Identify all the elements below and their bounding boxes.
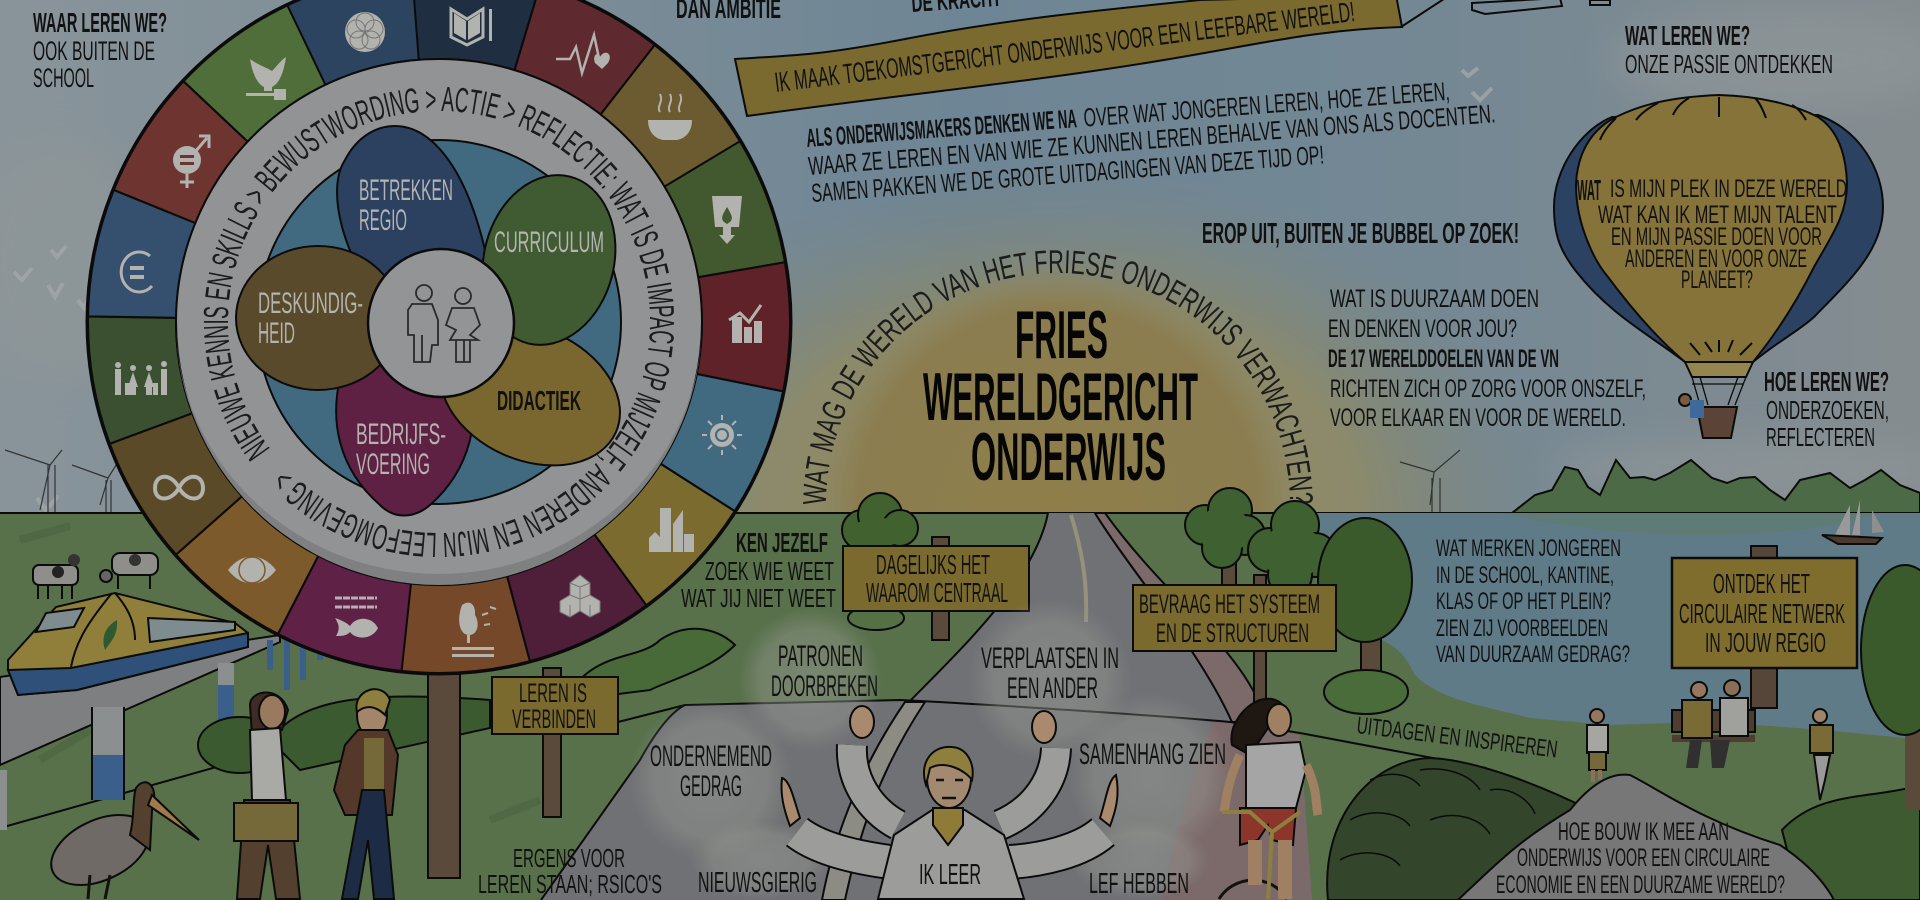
woman walking (234, 692, 300, 899)
hoe leren we (1764, 366, 1889, 452)
icon: bowl (648, 94, 692, 140)
ergens caption: ERGENS VOOR (513, 843, 625, 873)
segment: poverty (82, 302, 195, 445)
segment: land (395, 575, 530, 677)
circulair sign (1672, 546, 1857, 708)
skill labels: DOORBREKEN (771, 670, 878, 703)
wheel post (428, 670, 460, 878)
cyclist arms (1224, 755, 1318, 815)
infographic canvas: WERELDGERICHT (923, 359, 1198, 435)
blue inner disc (257, 140, 621, 504)
top left heading (33, 7, 167, 93)
clouds (0, 10, 1920, 500)
cyclist head (1267, 704, 1291, 736)
road centre stripe (1071, 515, 1086, 622)
petal: betrekken regio: REGIO (359, 204, 407, 237)
ergens caption: LEREN STAAN; RSICO'S (478, 869, 662, 899)
petal: curriculum: CURRICULUM (494, 226, 604, 259)
balloon text: WAT (1577, 175, 1601, 207)
balloon blue envelope (1554, 115, 1883, 362)
balloon passenger (1679, 394, 1704, 418)
balloon seams (1600, 97, 1806, 355)
skill labels: EEN ANDER (1007, 672, 1098, 705)
rock text (1496, 818, 1785, 899)
petal: deskundigheid: HEID (258, 317, 295, 350)
icon: family (115, 361, 167, 395)
jongeren text: IN DE SCHOOL, KANTINE, (1436, 562, 1614, 589)
horizon line (0, 512, 1920, 514)
cyclist hair (1231, 699, 1286, 755)
sailing boat (1822, 500, 1884, 544)
skill labels: PATRONEN (778, 640, 863, 673)
hanging blue drips (270, 640, 320, 690)
segment: quality education (402, 0, 540, 72)
distant treeline (1512, 460, 1920, 513)
icon: energy (702, 415, 742, 455)
sky background (0, 0, 1920, 515)
leren is verbinden sign (492, 668, 618, 817)
ken jezelf: WAT JIJ NIET WEET (681, 583, 836, 613)
sun glow (558, 163, 1558, 863)
segment: inequality (82, 189, 199, 334)
bench with youths (1672, 680, 1755, 768)
learner upper left arm (852, 745, 898, 825)
icon: growth chart (729, 305, 762, 343)
rock text: HOE BOUW IK MEE AAN (1558, 818, 1729, 846)
intro paragraph: ALS ONDERWIJSMAKERS DENKEN WE NA (805, 103, 1078, 153)
duurzaam text block: RICHTEN ZICH OP ZORG VOOR ONSZELF, (1330, 375, 1646, 403)
bushes around daily sign (842, 493, 918, 630)
top left heading: SCHOOL (33, 63, 94, 93)
cyclist shorts (1240, 808, 1296, 845)
rock with question (1458, 775, 1834, 900)
learner shirt label: IK LEER (919, 859, 981, 891)
circulair sign: IN JOUW REGIO (1705, 627, 1826, 658)
bike path upper (1095, 513, 1258, 722)
segment: cities (583, 452, 739, 609)
trees along road (1185, 488, 1412, 714)
wind turbines (5, 450, 1460, 513)
ken jezelf: KEN JEZELF (736, 527, 828, 558)
crossing path (822, 702, 925, 900)
dagelijks sign: DAGELIJKS HET (876, 549, 990, 580)
learner head (927, 748, 971, 808)
intro paragraph: WAAR ZE LEREN EN VAN WIE ZE KUNNEN LEREN BEHALVE VAN ONS ALS DOCENTEN. (807, 98, 1496, 181)
birds as check marks (14, 68, 1492, 543)
petal: betrekken regio (337, 126, 485, 300)
road edge lines (541, 513, 1232, 900)
learner lower right arm (1010, 832, 1103, 862)
sun half disc (813, 263, 1303, 763)
learner upper right arm (1000, 748, 1056, 825)
lake (1300, 513, 1920, 740)
uitdagen caption: UITDAGEN EN INSPIREREN (1355, 712, 1559, 764)
bevraag sign: EN DE STRUCTUREN (1156, 618, 1309, 648)
segment: hunger (590, 41, 745, 199)
icon: health pulse (556, 35, 610, 73)
monorail bridge (0, 635, 320, 830)
skill labels: GEDRAG (680, 770, 742, 803)
wat leren we (1625, 20, 1833, 79)
grass strokes (20, 526, 540, 880)
meadow ground (0, 513, 1920, 900)
balloon text (1577, 175, 1847, 294)
intro paragraph (805, 76, 1496, 208)
segment: gender (109, 78, 256, 237)
skill labels: SAMENHANG ZIEN (1079, 738, 1226, 771)
cows (33, 553, 158, 599)
ken jezelf: ZOEK WIE WEET (705, 556, 834, 586)
icon: flower (345, 12, 385, 52)
wheel outer circle (87, 0, 791, 674)
duurzaam text block: VOOR ELKAAR EN VOOR DE WERELD. (1330, 404, 1626, 432)
erop uit heading: EROP UIT, BUITEN JE BUBBEL OP ZOEK! (1202, 218, 1519, 250)
large front bush (1327, 758, 1590, 900)
right tree (1861, 565, 1920, 810)
skill labels: NIEUWSGIERIG (698, 867, 817, 899)
curved sun text: WAT MAG DE WERELD VAN HET FRIESE ONDERWIJS VERWACHTEN? (803, 250, 1313, 504)
petal: bedrijfsvoering: VOERING (356, 448, 430, 481)
segment: consumption (105, 399, 250, 558)
jongeren text (1436, 535, 1630, 668)
title: FRIES (1015, 297, 1108, 373)
icon: gender (173, 136, 209, 188)
petal: didactiek: DIDACTIEK (497, 385, 581, 416)
ring curved text: NIEUWE KENNIS EN SKILLS > BEWUSTWORDING > ACTIE > REFLECTIE: WAT IS DE IMPACT OP MIJZELF, ANDEREN EN MIJN LEEFOMGEVING > (204, 87, 674, 557)
icon: infinity (155, 477, 203, 498)
jongeren text: VAN DUURZAAM GEDRAG? (1436, 641, 1630, 668)
segment: health (500, 0, 657, 122)
girl with phone (1810, 709, 1833, 800)
icon: eye with globe (228, 556, 276, 584)
circulair sign: ONTDEK HET (1713, 568, 1810, 599)
cyclist (1219, 699, 1318, 899)
icon: tree (452, 603, 496, 657)
learner lower right arm fill (1010, 832, 1103, 862)
tow plane (1472, 0, 1610, 14)
icon: fish (335, 598, 378, 638)
jongeren text: WAT MERKEN JONGEREN (1436, 535, 1621, 562)
learner upper right arm fill (1000, 748, 1056, 825)
segment: sea (276, 551, 426, 677)
bike wheel (1219, 880, 1287, 899)
intro paragraph: SAMEN PAKKEN WE DE GROTE UITDAGINGEN VAN DEZE TIJD OP! (810, 140, 1325, 208)
icon: cubes (560, 575, 600, 617)
bush leaf lines (1340, 769, 1535, 866)
tow line (1401, 0, 1450, 27)
balloon text: PLANEET? (1681, 266, 1753, 294)
inner gray ring (176, 59, 702, 585)
icon: book (451, 9, 492, 45)
segment: energy (655, 359, 789, 513)
skill labels: ONDERNEMEND (650, 740, 772, 773)
learner hair (924, 747, 973, 785)
learner face (936, 780, 963, 798)
petal: deskundigheid: DESKUNDIG- (258, 287, 363, 320)
jongeren text: ZIEN ZIJ VOORBEELDEN (1436, 615, 1608, 642)
walking boy (1587, 709, 1608, 782)
skill bubbles glow (629, 598, 1232, 899)
petal: bedrijfsvoering: BEDRIJFS- (356, 418, 446, 451)
bevraag sign (1133, 575, 1336, 705)
segment: growth (697, 261, 791, 391)
ken jezelf (681, 527, 836, 613)
learner hands (781, 706, 1118, 826)
man walking (334, 689, 398, 899)
ergens caption (478, 843, 662, 899)
duurzaam text block (1328, 285, 1646, 432)
bridge pillars (0, 663, 234, 830)
centre circle with students (368, 249, 514, 397)
balloon basket (1697, 407, 1737, 438)
skill labels (650, 640, 1226, 900)
petal: curriculum (465, 161, 633, 359)
icon: water (712, 196, 742, 244)
segment: water (659, 139, 790, 292)
jongeren text: KLAS OF OP HET PLEIN? (1436, 588, 1611, 615)
duurzaam text block: WAT IS DUURZAAM DOEN (1330, 285, 1539, 313)
banner (735, 0, 1402, 116)
leren is verbinden sign: LEREN IS (519, 678, 587, 708)
hedges left (198, 629, 735, 773)
duurzaam text block: DE 17 WERELDDOELEN VAN DE VN (1328, 345, 1559, 373)
title: ONDERWIJS (971, 419, 1166, 495)
leren is verbinden sign: VERBINDEN (512, 704, 596, 734)
segment: climate (173, 486, 331, 639)
learner torso (878, 810, 1024, 899)
dagelijks sign: WAAROM CENTRAAL (866, 577, 1008, 608)
balloon yellow envelope (1576, 95, 1847, 362)
bicycle frame (1222, 812, 1300, 899)
balloon neck (1685, 362, 1753, 377)
learner figure (781, 706, 1118, 899)
godwit bird (40, 782, 199, 899)
top left heading: WAAR LEREN WE? (33, 7, 167, 38)
learner lower left arm (797, 832, 890, 862)
petal: betrekken regio: BETREKKEN (359, 174, 453, 207)
petal: didactiek (417, 295, 643, 493)
hot air balloon (1554, 95, 1883, 438)
dagelijks sign (843, 537, 1029, 640)
bevraag sign: BEVRAAG HET SYSTEEM (1139, 589, 1320, 619)
petal: deskundigheid (236, 246, 400, 390)
bike path lower (1162, 722, 1312, 900)
segment: partnership (286, 0, 434, 89)
cyclist shirt (1246, 742, 1306, 808)
learner lower left arm fill (797, 832, 890, 862)
learner upper left arm fill (852, 745, 898, 825)
ring inner shade (176, 322, 702, 585)
balloon ropes (1692, 377, 1746, 405)
icon: two students (408, 285, 480, 362)
cyclist leg (1255, 840, 1285, 899)
SDG wheel (86, 0, 792, 676)
title (923, 297, 1198, 495)
top left heading: OOK BUITEN DE (33, 36, 155, 66)
petal: bedrijfsvoering (336, 360, 474, 516)
intro paragraph: OVER WAT JONGEREN LEREN, HOE ZE LEREN, (1082, 76, 1451, 133)
right front bush (1782, 785, 1920, 900)
icon: peace dove (246, 57, 286, 100)
main road (541, 513, 1232, 900)
learner scarf (933, 808, 963, 845)
skill labels: LEF HEBBEN (1089, 868, 1189, 900)
duurzaam text block: EN DENKEN VOOR JOU? (1328, 315, 1517, 343)
segment: peace (180, 0, 339, 151)
icon: city (649, 508, 694, 552)
segment: innovation (493, 527, 649, 666)
path horizon lines (0, 700, 1920, 900)
skill labels: VERPLAATSEN IN (981, 642, 1119, 675)
monorail train (8, 593, 248, 695)
wat leren we: WAT LEREN WE? (1625, 20, 1750, 51)
icon: equals (121, 252, 152, 292)
lake green reflection (1500, 513, 1880, 535)
